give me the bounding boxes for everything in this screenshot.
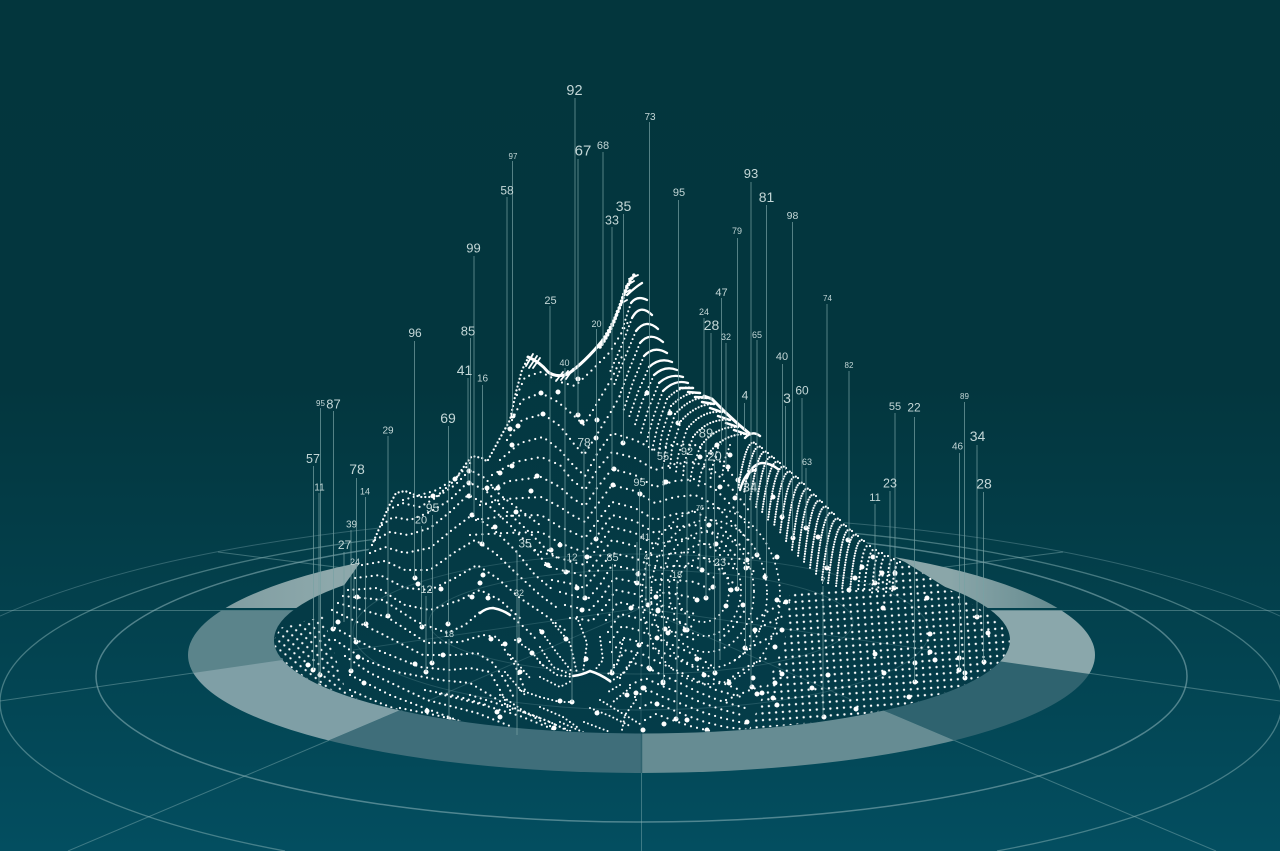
pin 92: 92 bbox=[566, 83, 583, 99]
pin 82: 82 bbox=[845, 361, 854, 370]
mini peak and horseshoe bbox=[480, 608, 610, 681]
pin 41 center: 41 bbox=[640, 532, 650, 542]
pin 28 right: 28 bbox=[976, 476, 992, 492]
pin 28 center: 28 bbox=[704, 317, 719, 333]
ring segment: upper left bbox=[226, 562, 360, 608]
pin 79: 79 bbox=[732, 226, 742, 236]
pin 63: 63 bbox=[802, 457, 812, 467]
pin 29: 29 bbox=[382, 426, 394, 436]
pin 40 center: 40 bbox=[559, 358, 570, 368]
pin 12 left bbox=[420, 584, 433, 672]
pin 63 bbox=[802, 457, 812, 528]
ring segment: lower right bbox=[884, 662, 1089, 740]
pin 4: 4 bbox=[742, 388, 749, 402]
pin 78 left: 78 bbox=[349, 461, 365, 477]
pin 34 center: 34 bbox=[743, 480, 757, 494]
summit ridge bbox=[528, 340, 603, 376]
ring segment: right bbox=[991, 610, 1095, 674]
pin 24 left bbox=[350, 557, 360, 597]
pin 55 right: 55 bbox=[889, 401, 901, 413]
pin 20 left flank bbox=[415, 514, 427, 627]
pin 16: 16 bbox=[477, 374, 488, 384]
pin 89 center: 89 bbox=[699, 426, 713, 440]
pin 95 upper: 95 bbox=[673, 187, 685, 199]
pin 11 right: 11 bbox=[869, 492, 881, 504]
regular dot lattice at the left rim bbox=[274, 616, 346, 694]
pin 28 center bbox=[704, 317, 719, 402]
ring segment: left bbox=[188, 610, 293, 673]
pin 97: 97 bbox=[509, 152, 518, 161]
pin 65: 65 bbox=[752, 330, 762, 340]
pin 23 right bbox=[883, 476, 897, 573]
pin 46: 46 bbox=[952, 442, 963, 452]
ridge crest wedge bbox=[704, 396, 750, 434]
pin 74: 74 bbox=[823, 294, 832, 303]
ridge dots on the back edge bbox=[372, 358, 528, 545]
pin 89: 89 bbox=[960, 392, 969, 401]
pin 81: 81 bbox=[759, 189, 774, 205]
pin 58: 58 bbox=[500, 184, 514, 198]
pin 95 left flank: 95 bbox=[426, 501, 439, 515]
pin 14: 14 bbox=[360, 486, 370, 496]
pin 98: 98 bbox=[787, 210, 798, 222]
pin 87: 87 bbox=[326, 396, 341, 412]
mountain silhouette and inner floor bbox=[274, 514, 1010, 734]
pin 12 left: 12 bbox=[420, 584, 433, 596]
pin 85 center: 85 bbox=[606, 552, 619, 564]
pin 24: 24 bbox=[699, 307, 709, 317]
pin 11 right bbox=[869, 492, 881, 583]
pin 24 left: 24 bbox=[350, 557, 360, 567]
pin 40 right: 40 bbox=[776, 351, 788, 363]
pin 4 center: 4 bbox=[644, 553, 649, 562]
pin 78 center: 78 bbox=[577, 436, 591, 450]
pin 57: 57 bbox=[306, 452, 320, 466]
pin 95 left: 95 bbox=[316, 399, 325, 408]
pin 24 bbox=[699, 307, 709, 400]
pin 23 center: 23 bbox=[714, 557, 726, 569]
pin 20 left flank: 20 bbox=[415, 514, 427, 526]
fan of rows around the horseshoe bbox=[500, 617, 640, 733]
pin 85: 85 bbox=[461, 324, 475, 338]
pin 85 center bbox=[606, 552, 619, 673]
pin 32 low: 32 bbox=[514, 588, 524, 598]
central wavy rows bbox=[470, 452, 790, 731]
pin 18 left bbox=[444, 629, 454, 719]
pin 76: 76 bbox=[696, 505, 704, 512]
pin 60 bbox=[795, 384, 809, 483]
left ridge rows bbox=[332, 460, 575, 733]
pin 25: 25 bbox=[544, 295, 557, 307]
summit ticks bbox=[526, 275, 638, 381]
pin 3: 3 bbox=[783, 390, 791, 406]
pin 4 bbox=[742, 388, 749, 430]
data ring: segmented band bbox=[188, 556, 1095, 773]
pin 39: 39 bbox=[346, 520, 357, 530]
solid arch tips bbox=[680, 388, 746, 434]
pin 32 low bbox=[514, 588, 524, 640]
back rows under the saddle bbox=[500, 322, 735, 478]
pin 47: 47 bbox=[715, 287, 728, 299]
pin 20 center: 20 bbox=[707, 448, 722, 464]
pin 41: 41 bbox=[457, 362, 472, 378]
pin 12 center: 12 bbox=[566, 552, 578, 564]
pin 73: 73 bbox=[644, 112, 656, 123]
pin 55 center: 55 bbox=[657, 451, 669, 463]
pin 22: 22 bbox=[907, 400, 921, 414]
pin 27: 27 bbox=[338, 538, 351, 552]
dense ridge strokes on the right slope bbox=[738, 443, 864, 591]
pin 3 bbox=[783, 390, 791, 470]
pin 68: 68 bbox=[597, 140, 609, 152]
pin 27 bbox=[338, 538, 351, 622]
pin 20 upper: 20 bbox=[591, 319, 602, 329]
pin 35 center: 35 bbox=[518, 536, 532, 550]
pin 41 center bbox=[637, 532, 650, 583]
polar grid: rings and spokes bbox=[0, 515, 1280, 851]
pin 93: 93 bbox=[744, 166, 758, 181]
small ridge peak bbox=[740, 433, 778, 490]
pin 67: 67 bbox=[575, 142, 591, 160]
dotted terrain surface bbox=[270, 275, 1020, 740]
pin 23 center bbox=[714, 557, 726, 660]
peak arch legs bbox=[610, 303, 730, 488]
pin 96: 96 bbox=[408, 326, 422, 340]
data pins: vertical lines with numeric labels bbox=[306, 83, 992, 735]
pin 99: 99 bbox=[466, 240, 481, 256]
pin 76 bbox=[696, 505, 704, 570]
pin 18 left: 18 bbox=[444, 629, 454, 639]
pin 32: 32 bbox=[721, 332, 731, 342]
ring segment: front right bbox=[642, 710, 954, 773]
main peak arches bbox=[627, 283, 688, 391]
ring segment: lower left bbox=[193, 660, 400, 740]
pin 34 right: 34 bbox=[970, 428, 985, 444]
pin 7: 7 bbox=[820, 576, 826, 586]
pin 60: 60 bbox=[795, 384, 809, 398]
pin 95 center: 95 bbox=[633, 477, 646, 489]
regular dot lattice at the right rim bbox=[750, 561, 1010, 729]
bright highlight dots bbox=[308, 379, 988, 730]
pin 35: 35 bbox=[616, 198, 631, 214]
pin 33: 33 bbox=[605, 214, 619, 228]
pin 32 bbox=[721, 332, 731, 467]
ring segment: front left bbox=[329, 710, 641, 773]
beaded arches below the peak bbox=[667, 387, 746, 456]
pin 41 bbox=[457, 362, 472, 483]
pin 23 right: 23 bbox=[883, 476, 897, 490]
pin 14 bbox=[360, 486, 370, 624]
pin 92 center: 92 bbox=[681, 446, 693, 458]
pin 11 left: 11 bbox=[314, 482, 325, 494]
pin 18 center: 18 bbox=[672, 570, 682, 580]
pin 4 center bbox=[644, 553, 649, 605]
pin 69: 69 bbox=[440, 410, 456, 426]
ring-shaped contours on the right flank bbox=[642, 508, 780, 684]
ring segment: upper right bbox=[894, 556, 1058, 608]
